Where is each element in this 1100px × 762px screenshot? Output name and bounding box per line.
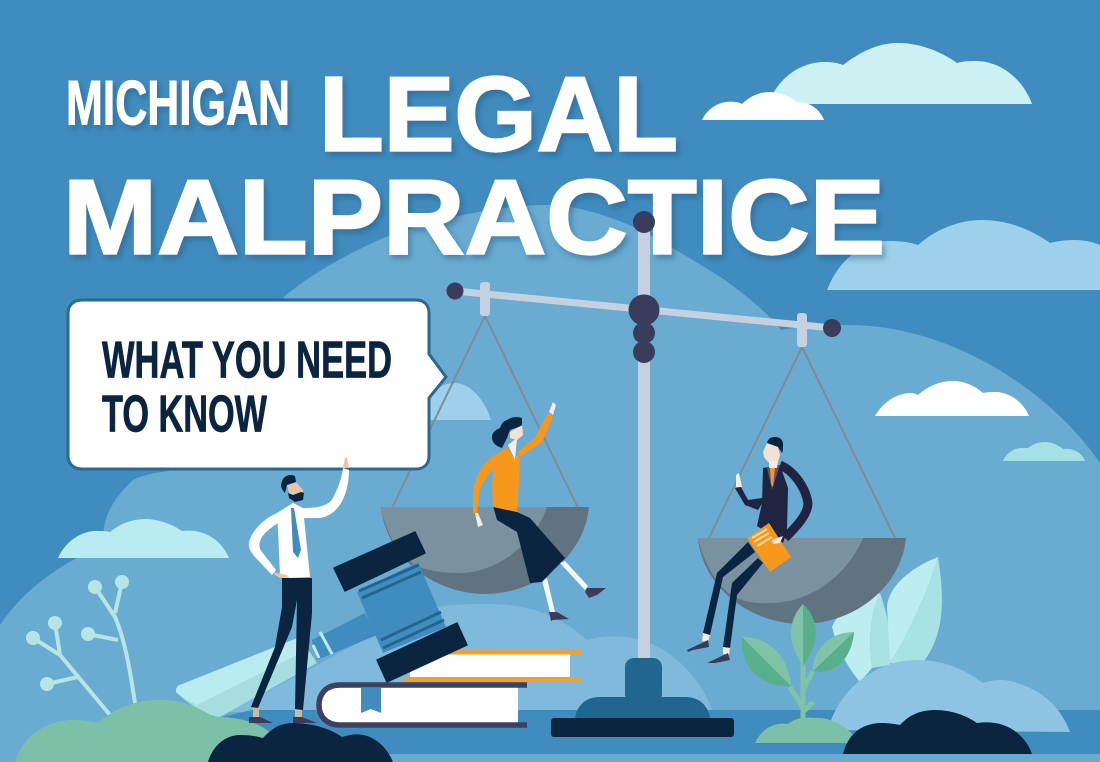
man pants — [251, 578, 312, 710]
man beard — [288, 492, 304, 502]
bottom strip — [0, 754, 1100, 762]
title word: Malpractice: MALPRACTICE — [63, 158, 885, 276]
woman left arm — [473, 455, 495, 513]
gavel — [176, 532, 467, 717]
bush: dark left — [208, 723, 393, 762]
bush: green base of sprout — [755, 718, 858, 743]
sprout left leaf — [742, 637, 791, 686]
bush: dark right — [843, 710, 1032, 754]
scale left strings — [392, 316, 578, 508]
lawyer tie — [770, 468, 775, 487]
lawyer leg far — [703, 542, 755, 635]
cloud: blue right — [827, 220, 1100, 290]
cloud: small white top — [702, 92, 824, 120]
cloud: small aqua right — [1003, 442, 1085, 461]
cloud: white right — [875, 381, 1029, 416]
gavel body — [357, 562, 446, 653]
right hook — [797, 313, 807, 347]
man hair — [281, 475, 296, 493]
scale — [380, 211, 909, 737]
woman legs — [542, 561, 588, 612]
woman face — [510, 425, 523, 440]
woman raised arm — [518, 413, 553, 457]
lawyer on right pan — [687, 437, 808, 663]
sprout right leaf — [813, 632, 854, 672]
bush: light blue bottom right — [828, 660, 1070, 732]
scale right strings — [709, 347, 895, 538]
ground band — [205, 710, 1100, 754]
cloud: pale left — [58, 519, 229, 558]
lawyer raised arm — [735, 487, 763, 510]
woman neck — [508, 438, 517, 460]
plant twigs — [26, 575, 135, 715]
lawyer neck — [769, 461, 778, 468]
books — [319, 652, 579, 725]
lawyer hand — [736, 473, 742, 487]
title — [63, 56, 885, 276]
lawyer socks — [702, 633, 730, 655]
man left arm — [249, 513, 278, 575]
hill: light front mound — [217, 604, 713, 718]
beam knobs — [446, 211, 841, 363]
sprout top leaf — [791, 604, 815, 666]
man torso — [277, 503, 310, 578]
man hands — [273, 457, 349, 578]
lower book — [319, 685, 527, 725]
left pan — [380, 505, 592, 597]
woman hair — [492, 417, 522, 448]
man face — [287, 482, 303, 497]
lawyer folder — [747, 523, 791, 572]
lawyer shoes — [687, 640, 730, 663]
bush: green left — [15, 700, 273, 762]
gavel bottom block — [377, 623, 467, 682]
man with speech bubble — [249, 457, 349, 723]
bubble text line 2: TO KNOW — [102, 386, 268, 444]
title word: Legal: LEGAL — [319, 56, 678, 174]
right pan — [697, 536, 909, 628]
scale beam — [455, 291, 832, 328]
scale base — [551, 658, 734, 737]
cloud: pale top right — [768, 43, 1032, 104]
man tie — [291, 508, 301, 558]
upper book — [405, 652, 579, 680]
lawyer collar — [767, 465, 780, 490]
bookmark — [361, 688, 381, 713]
scale post — [638, 225, 650, 665]
lawyer face — [763, 443, 780, 462]
left hook — [480, 282, 490, 316]
man socks — [253, 707, 302, 718]
title word: Michigan: MICHIGAN — [66, 68, 290, 138]
gavel top block — [334, 532, 425, 591]
gavel handle — [176, 637, 317, 717]
lawyer hair — [767, 437, 783, 453]
woman hands — [475, 402, 556, 527]
woman shoes — [549, 588, 606, 621]
woman torso — [492, 447, 520, 512]
woman skirt — [493, 506, 565, 583]
lawyer torso — [757, 465, 788, 543]
man raised arm — [302, 468, 349, 518]
bubble text line 1: WHAT YOU NEED — [102, 332, 392, 390]
woman on left pan — [473, 402, 606, 621]
lawyer leg near — [723, 558, 763, 648]
hills — [0, 205, 1100, 762]
cloud: behind speech bubble — [425, 383, 491, 420]
lawyer bent arm — [780, 465, 808, 538]
pale leaves — [832, 557, 942, 682]
plant sprout — [742, 604, 854, 720]
gavel grip — [312, 613, 377, 660]
speech bubble — [68, 300, 446, 469]
man shoes — [249, 717, 317, 723]
